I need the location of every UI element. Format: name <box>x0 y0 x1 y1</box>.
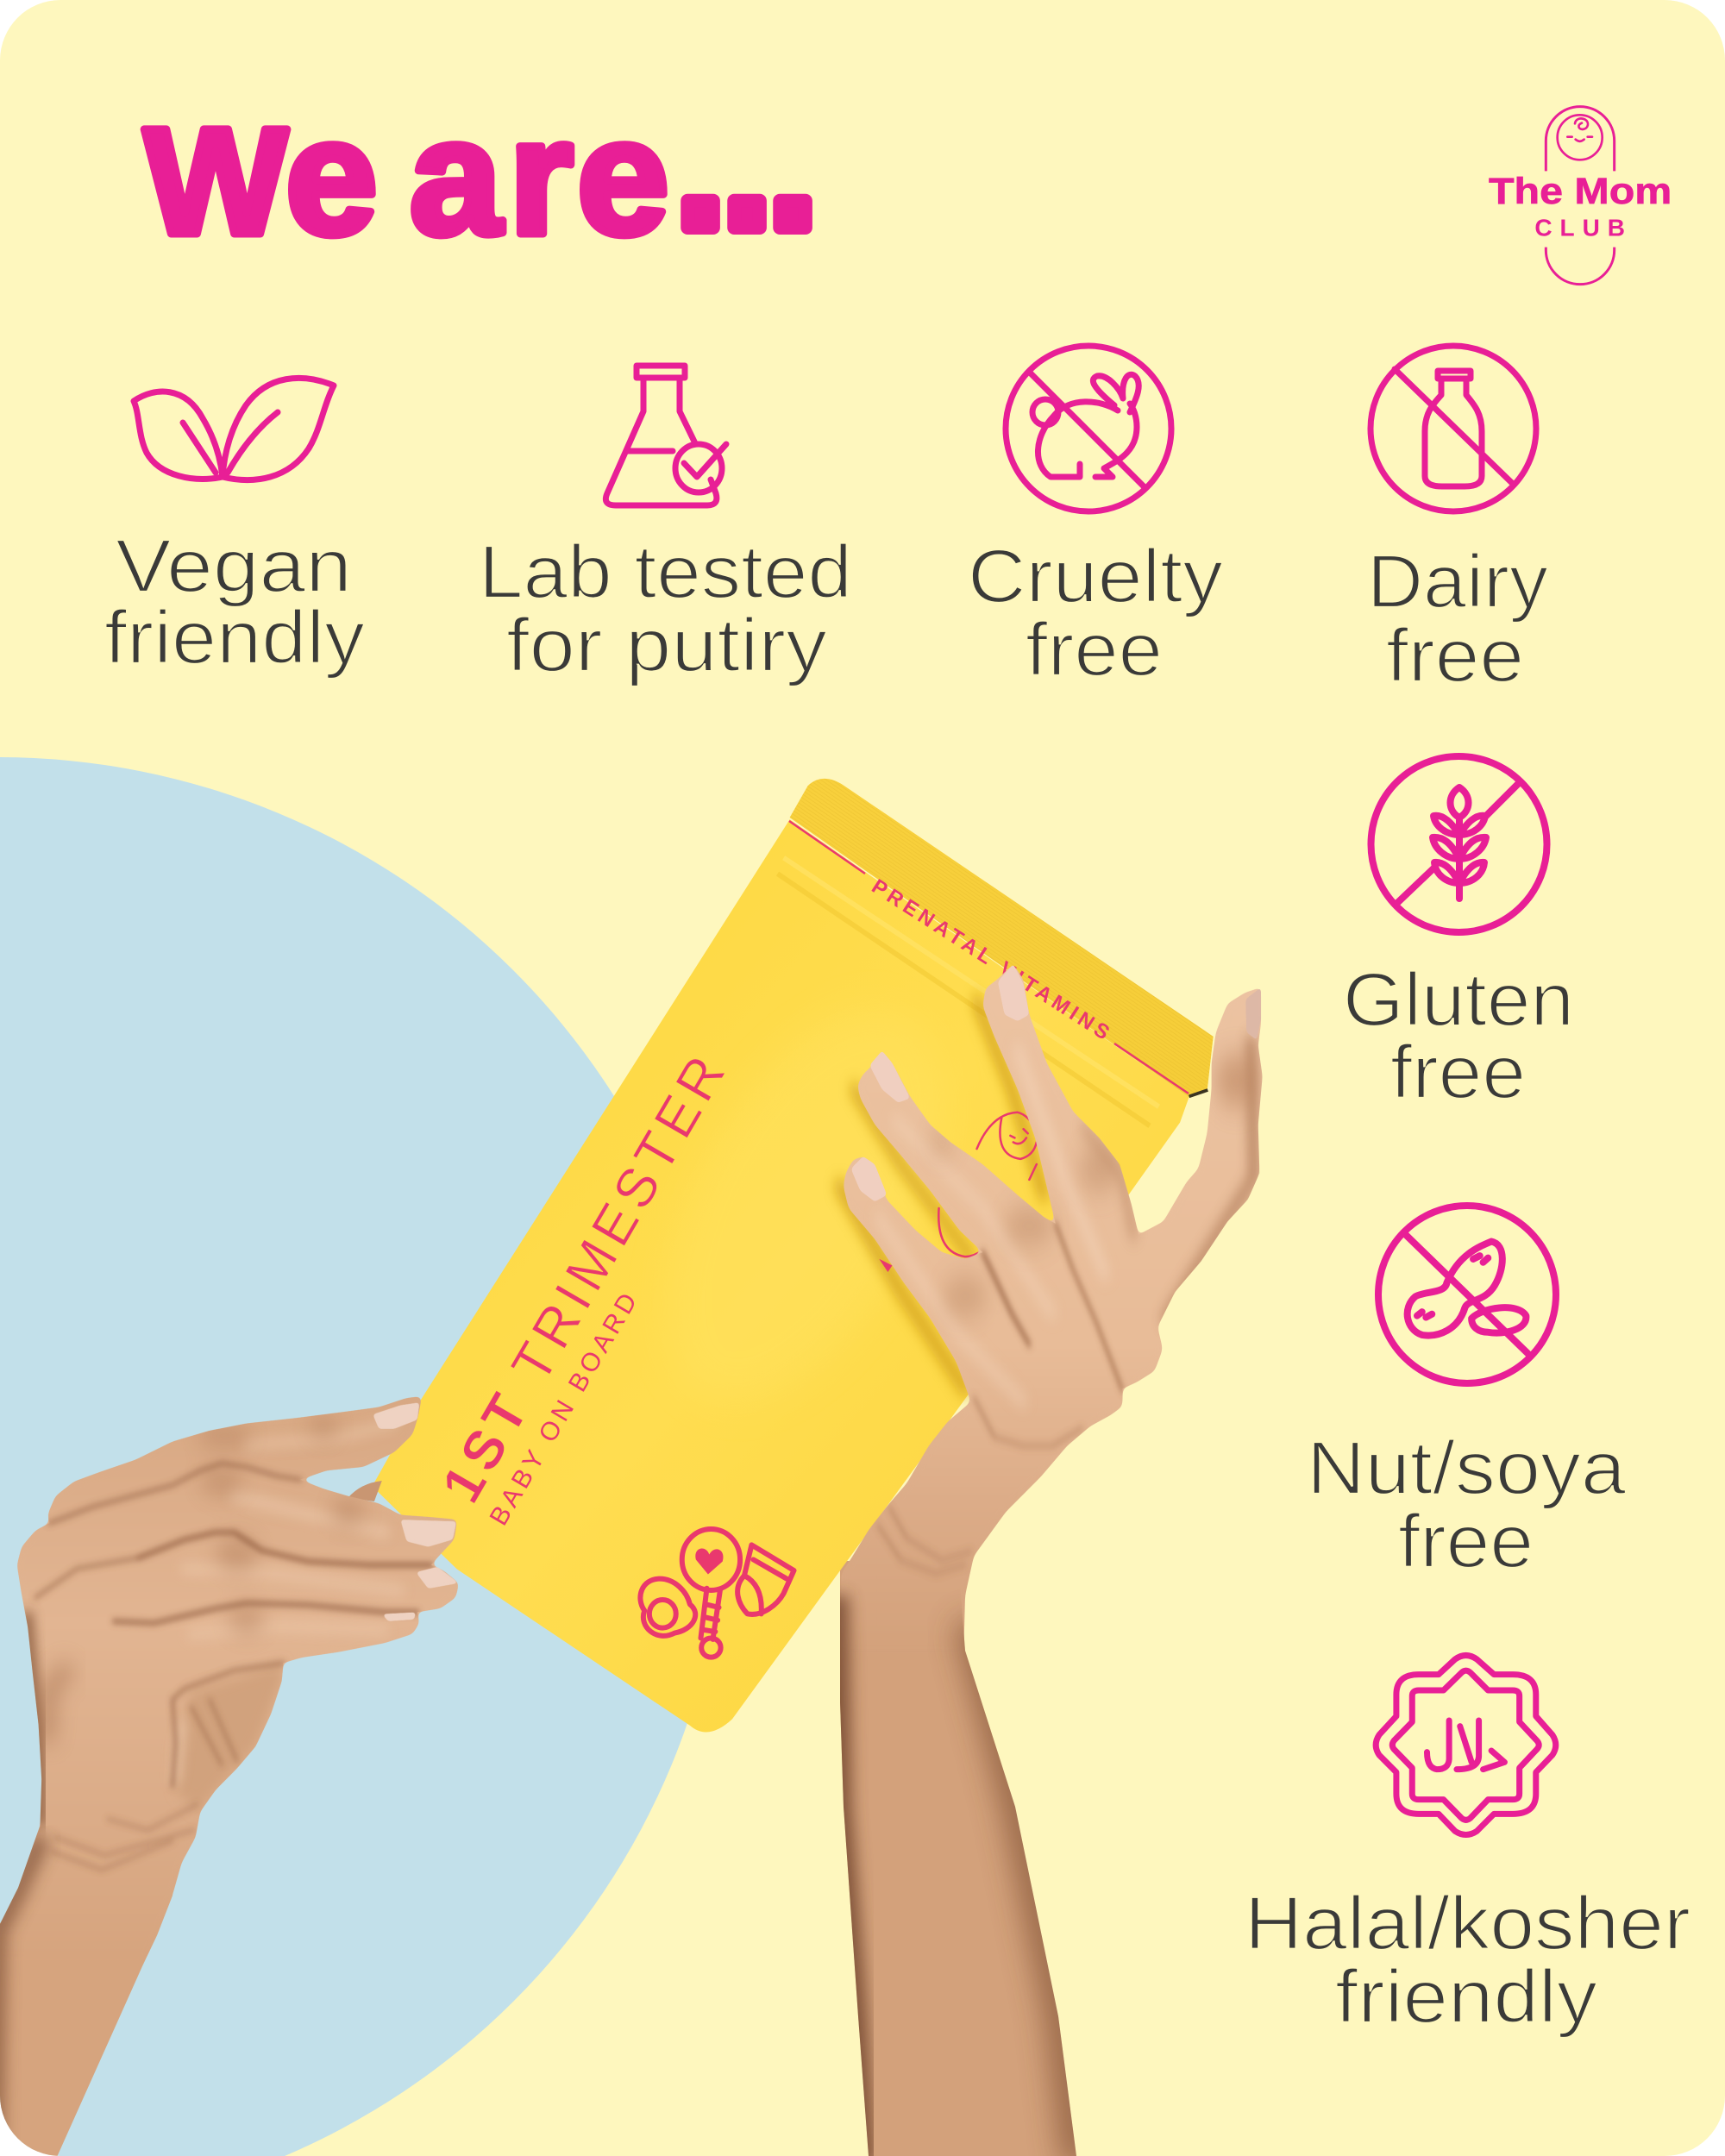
pouch icon: heart <box>695 1549 724 1574</box>
icon: halal badge <box>1376 1655 1556 1834</box>
foil highlight <box>608 960 1002 1451</box>
flap rule right <box>1114 1044 1189 1094</box>
fingernails <box>373 1402 459 1621</box>
right hand silhouette <box>841 964 1263 1652</box>
icon: crossed nuts <box>1378 1206 1556 1383</box>
pouch flap <box>790 779 1214 1097</box>
lab tested item <box>479 366 852 687</box>
blue circle backdrop <box>0 757 727 2156</box>
finger creases <box>35 1463 431 1870</box>
thumb pad tone <box>176 1663 284 1812</box>
logo: The Mom Club <box>1489 107 1672 285</box>
thumb tip behind pouch <box>348 1481 382 1501</box>
left forearm shading <box>0 1837 41 2156</box>
left hand silhouette <box>0 1396 459 1960</box>
logo arch top <box>1546 107 1615 171</box>
forearm left shadow <box>835 1595 862 2156</box>
fingernails <box>851 964 1261 1201</box>
pouch icon: fried egg <box>640 1579 695 1636</box>
left hand shading <box>26 1415 431 1870</box>
thumb shade <box>1164 1037 1254 1323</box>
outer edge shadow <box>26 1612 40 1827</box>
finger creases <box>878 1224 1123 1573</box>
finger highlights <box>176 1424 400 1779</box>
pouch logo fragment <box>879 1259 892 1272</box>
right forearm shading <box>835 1595 1080 2156</box>
pouch icon: diaper <box>737 1545 794 1614</box>
finger shadow on pouch <box>840 1001 1044 1388</box>
back of hand shadow <box>47 1667 71 1743</box>
pouch logo behind fingers <box>938 1112 1038 1257</box>
left hand <box>0 1396 459 1960</box>
vegan item <box>104 378 366 680</box>
thumb joint tone <box>1216 1054 1257 1107</box>
knuckle tones <box>198 1415 365 1634</box>
finger dorsal edge shade <box>1082 1125 1134 1239</box>
label: lab tested: Lab tested <box>479 530 852 614</box>
label: free: free <box>1398 1500 1534 1583</box>
label: dairy: Dairy <box>1367 540 1549 624</box>
label: nut/soya: Nut/soya <box>1307 1426 1627 1510</box>
label: vegan: Vegan <box>116 524 352 608</box>
left forearm shadow <box>0 1837 41 2156</box>
label: for purity: for putiry <box>506 604 828 687</box>
flap rule left <box>789 821 865 874</box>
logo sub wordmark: CLUB <box>1534 214 1625 241</box>
pouch <box>373 779 1214 1733</box>
pouch body <box>373 819 1189 1733</box>
label: cruelty: Cruelty <box>968 535 1224 618</box>
right forearm skin <box>840 1561 1076 2156</box>
forearm right shadow <box>971 1621 1080 2156</box>
label: friendly: friendly <box>1335 1955 1598 2039</box>
icon: crossed rabbit <box>1006 346 1171 511</box>
label: free: free <box>1390 1031 1526 1114</box>
pouch heading: 1ST TRIMESTER <box>430 1045 737 1513</box>
icon: leaves <box>134 378 334 480</box>
title: are <box>410 84 669 269</box>
pouch subheading: BABY ON BOARD <box>485 1288 643 1531</box>
zip seal shade <box>778 874 1150 1125</box>
halal and kosher item <box>1245 1655 1690 2039</box>
icon: flask with check <box>605 366 726 505</box>
flap slit <box>1189 1090 1208 1096</box>
cruelty free item <box>968 346 1224 692</box>
logo baby face <box>1558 115 1603 160</box>
icon: crossed milk bottle <box>1371 346 1536 511</box>
logo arch bottom <box>1546 248 1615 285</box>
right hand <box>840 964 1263 1652</box>
title: W <box>144 97 287 266</box>
left forearm skin <box>0 1811 181 2156</box>
label: gluten: Gluten <box>1343 958 1574 1042</box>
logo wordmark: The Mom <box>1489 171 1672 212</box>
zip seal highlight <box>784 858 1159 1106</box>
icon: crossed wheat <box>1371 756 1547 932</box>
nut and soya free item <box>1307 1206 1627 1583</box>
title: e <box>285 84 378 269</box>
label: free: free <box>1026 608 1163 692</box>
label: halal/kosher: Halal/kosher <box>1245 1882 1690 1965</box>
title: ... <box>675 64 818 266</box>
label: friendly: friendly <box>104 596 366 680</box>
dairy free item <box>1367 346 1549 698</box>
pouch flap text: PRENATAL VITAMINS <box>868 874 1113 1044</box>
label: free: free <box>1386 614 1524 698</box>
pouch icon: rattle <box>682 1529 740 1658</box>
knuckle tones <box>929 1131 1120 1316</box>
right hand shading <box>878 1037 1257 1573</box>
gluten free item <box>1343 756 1574 1114</box>
flap ribbing <box>790 779 1214 1097</box>
finger highlights <box>878 1050 1105 1402</box>
